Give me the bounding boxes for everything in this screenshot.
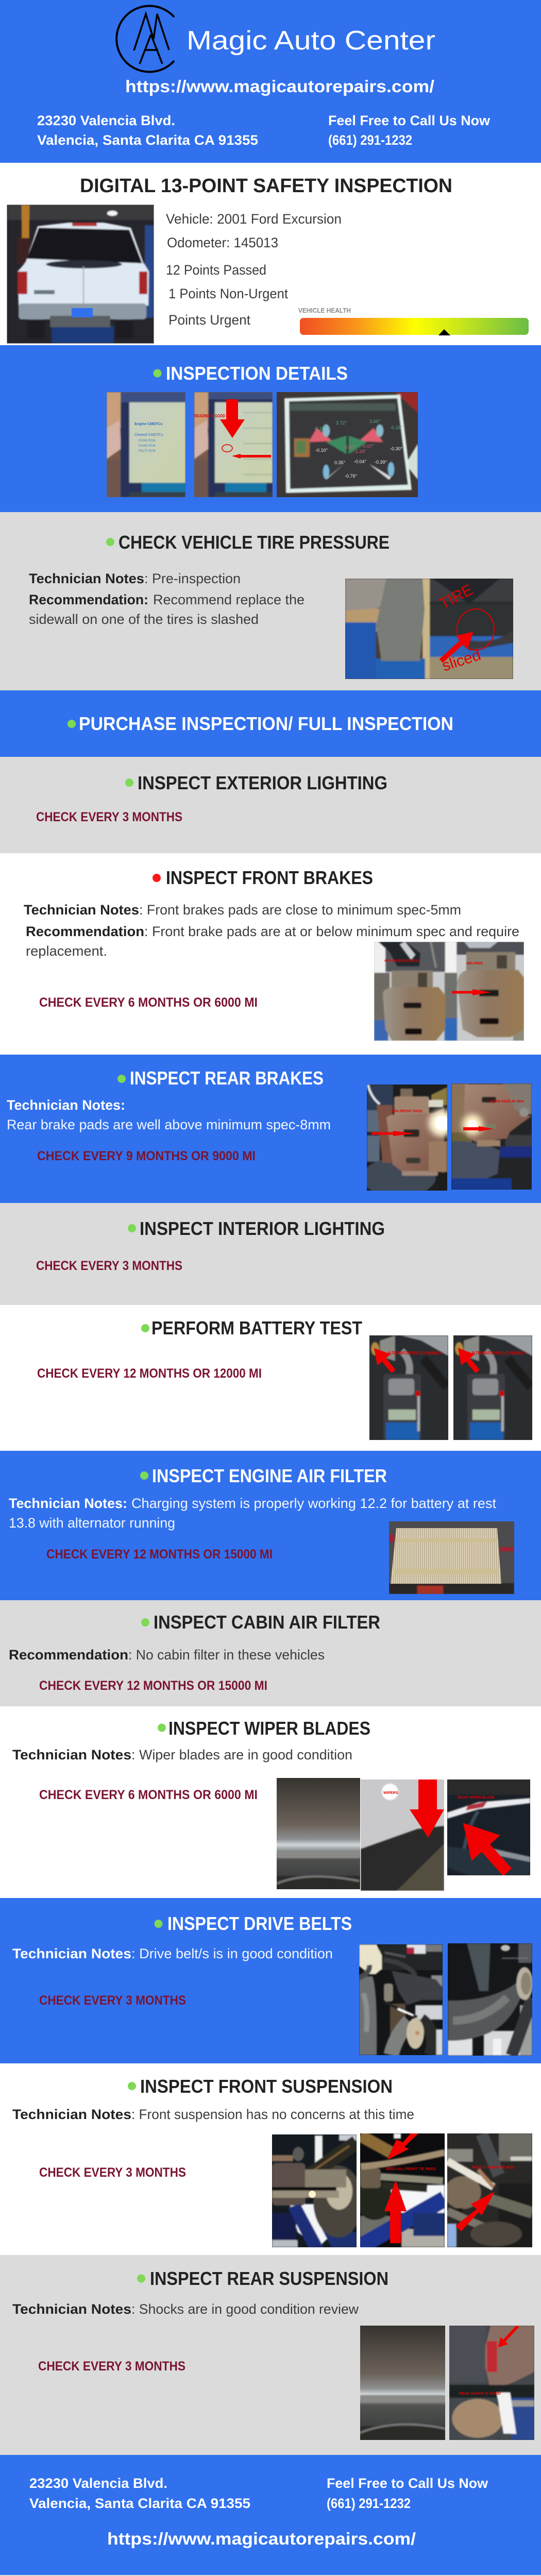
vehicle details: 12 Points Passed xyxy=(166,262,266,278)
heading: cabin air filter: INSPECT CABIN AIR FILTER xyxy=(154,1612,380,1633)
panel: inspect wiper blades xyxy=(0,1706,541,1898)
photo: battery tester one xyxy=(369,1335,448,1440)
photo: wheel alignment printout: 0.35° xyxy=(334,460,346,465)
photo: rear caliper two xyxy=(451,1083,532,1190)
technician notes: Charging system is properly working 12.2 for battery at rest xyxy=(131,1496,496,1511)
panel: perform battery test xyxy=(0,1305,541,1451)
panel: inspect engine air filter xyxy=(0,1451,541,1600)
photo: front suspension two: NEED ALL FRONT TIE RODS xyxy=(386,2167,436,2171)
photo: wheel alignment printout: -0.10° xyxy=(315,448,328,453)
photo: front suspension two xyxy=(360,2133,445,2247)
photo: wheel alignment printout: 3.72° xyxy=(336,420,347,426)
technician notes: Technician Notes: xyxy=(7,1097,125,1113)
photo: wheel alignment printout xyxy=(277,392,418,497)
photo: rear suspension windshield xyxy=(360,2326,445,2440)
recommendation: : No cabin filter in these vehicles xyxy=(128,1647,325,1663)
service interval: CHECK EVERY 3 MONTHS xyxy=(38,2359,185,2374)
technician notes xyxy=(7,1097,331,1132)
service interval: CHECK EVERY 12 MONTHS OR 15000 MI xyxy=(39,1679,267,1693)
service interval: CHECK EVERY 3 MONTHS xyxy=(39,1993,186,2008)
technician notes: : Front brake pads are at or below minimum spec and require xyxy=(144,924,519,939)
technician notes: Technician Notes xyxy=(29,571,144,586)
recommendation xyxy=(9,1647,325,1663)
technician notes: Technician Notes xyxy=(12,1946,131,1961)
heading: exterior lighting: INSPECT EXTERIOR LIGHTING xyxy=(138,772,387,793)
photo: wiper with red arrow: WIPERS xyxy=(383,1791,398,1795)
photo: rear wiper blade xyxy=(447,1780,530,1875)
photo: front suspension one xyxy=(272,2134,357,2247)
technician notes xyxy=(24,902,519,959)
technician notes xyxy=(29,571,305,627)
photo: tires with slice marked: TIRE xyxy=(437,581,476,613)
technician notes: : Pre-inspection xyxy=(144,571,241,586)
vehicle details: Points Urgent xyxy=(168,312,250,328)
service interval: CHECK EVERY 3 MONTHS xyxy=(36,810,182,824)
vehicle details: Odometer: 145013 xyxy=(167,235,278,250)
technician notes: Technician Notes: xyxy=(9,1496,127,1511)
address: Valencia, Santa Clarita CA 91355 xyxy=(37,132,258,148)
service interval: CHECK EVERY 6 MONTHS OR 6000 MI xyxy=(39,995,258,1010)
service interval: CHECK EVERY 9 MONTHS OR 9000 MI xyxy=(37,1149,256,1163)
technician notes: Recommendation xyxy=(26,924,144,939)
panel: header xyxy=(0,0,541,163)
technician notes: : Wiper blades are in good condition xyxy=(131,1747,352,1762)
heading: drive belts: INSPECT DRIVE BELTS xyxy=(167,1913,352,1934)
technician notes: sidewall on one of the tires is slashed xyxy=(29,612,259,627)
service interval: CHECK EVERY 12 MONTHS OR 12000 MI xyxy=(37,1366,262,1381)
vehicle details: 1 Points Non-Urgent xyxy=(168,286,288,301)
panel: inspection details xyxy=(0,345,541,512)
photo: scan tool codes: P1000 PCM xyxy=(139,439,155,443)
technician notes: 13.8 with alternator running xyxy=(9,1515,175,1531)
recommendation: Recommendation xyxy=(9,1647,128,1663)
phone xyxy=(327,2476,488,2511)
service interval: CHECK EVERY 12 MONTHS OR 15000 MI xyxy=(46,1547,273,1562)
photo: wheel alignment printout: -0.39° xyxy=(375,460,387,465)
icon: Magic Auto logo xyxy=(116,6,174,72)
photo: front brake calipers xyxy=(374,942,524,1041)
photo: wheel alignment printout: -0.76° xyxy=(345,473,358,479)
service interval: CHECK EVERY 6 MONTHS OR 6000 MI xyxy=(39,1788,258,1802)
phone: Feel Free to Call Us Now xyxy=(328,113,491,128)
technician notes: Technician Notes xyxy=(24,902,139,918)
photo: windshield wipers front xyxy=(277,1778,360,1889)
heading: rear brakes: INSPECT REAR BRAKES xyxy=(130,1067,324,1089)
heading: engine air filter: INSPECT ENGINE AIR FILTER xyxy=(152,1465,387,1486)
panel: check vehicle tire pressure xyxy=(0,512,541,690)
technician notes xyxy=(12,2107,414,2122)
panel: inspect rear brakes xyxy=(0,1055,541,1203)
photo: engine air filter xyxy=(389,1521,514,1594)
technician notes: : Front suspension has no concerns at this time xyxy=(131,2107,414,2122)
phone: (661) 291-1232 xyxy=(328,132,412,148)
photo: rear caliper one: 65% FRONT PADS xyxy=(392,1110,422,1113)
photo: engine bay belt two xyxy=(448,1943,532,2056)
photo: front suspension three xyxy=(447,2133,532,2247)
vehicle details: Vehicle: 2001 Ford Excursion xyxy=(166,211,342,227)
photo: wiper with red arrow xyxy=(361,1780,444,1891)
panel: inspect drive belts xyxy=(0,1898,541,2063)
panel: inspect front suspension xyxy=(0,2063,541,2255)
panel: footer contact xyxy=(0,2455,541,2575)
heading: interior lighting: INSPECT INTERIOR LIGHTING xyxy=(140,1218,385,1239)
heading: battery test: PERFORM BATTERY TEST xyxy=(151,1317,362,1338)
website url: https://www.magicautorepairs.com/ xyxy=(125,77,434,96)
photo: scan data with arrows: READING IS GOOD xyxy=(194,414,225,418)
photo: scan tool codes xyxy=(107,392,185,497)
vehicle details xyxy=(166,211,342,328)
technician notes: replacement. xyxy=(26,943,107,959)
technician notes: Recommendation: xyxy=(29,592,148,607)
panel: inspect front brakes xyxy=(0,853,541,1055)
photo: tires with slice marked: sliced xyxy=(440,647,483,675)
photo: rear caliper one xyxy=(367,1084,447,1191)
technician notes: Rear brake pads are well above minimum spec-8mm xyxy=(7,1117,331,1132)
heading: rear suspension: INSPECT REAR SUSPENSION xyxy=(150,2268,388,2289)
photo: wheel alignment printout: -0.57° xyxy=(344,445,357,450)
technician notes xyxy=(9,1496,496,1531)
website url: https://www.magicautorepairs.com/ xyxy=(107,2529,416,2548)
address: 23230 Valencia Blvd. xyxy=(37,113,175,128)
technician notes: Technician Notes xyxy=(12,2301,131,2317)
technician notes: Technician Notes xyxy=(12,2107,131,2122)
heading: tire pressure: CHECK VEHICLE TIRE PRESSURE xyxy=(119,532,390,553)
panel: inspect rear suspension xyxy=(0,2255,541,2455)
technician notes xyxy=(12,1946,333,1961)
photo: wheel alignment printout: -0.16° xyxy=(390,425,403,430)
panel: vehicle summary xyxy=(0,163,541,345)
panel: purchase inspection banner xyxy=(0,690,541,757)
photo: tires with slice marked xyxy=(345,579,513,679)
photo: wheel alignment printout: -1.24° xyxy=(354,449,367,454)
heading: front brakes: INSPECT FRONT BRAKES xyxy=(166,867,373,888)
address xyxy=(29,2476,250,2511)
photo: front brake calipers: 45% ON BRAKE PADS xyxy=(384,959,419,963)
technician notes: : Drive belt/s is in good condition xyxy=(131,1946,333,1961)
photo: wheel alignment printout: 3.60° xyxy=(369,419,381,424)
panel: inspect exterior lighting xyxy=(0,757,541,853)
photo: engine bay belt one xyxy=(359,1944,443,2055)
photo: battery tester two xyxy=(453,1335,532,1440)
address: 23230 Valencia Blvd. xyxy=(29,2476,167,2491)
service interval: CHECK EVERY 3 MONTHS xyxy=(36,1259,182,1273)
panel: inspect cabin air filter xyxy=(0,1600,541,1706)
technician notes: : Shocks are in good condition review xyxy=(131,2301,359,2317)
photo: scan tool codes: Cleared CMDTCs xyxy=(134,433,163,437)
phone: Feel Free to Call Us Now xyxy=(327,2476,488,2491)
technician notes: Recommend replace the xyxy=(153,592,305,607)
photo: rear wiper blade: REAR WIPER BLADE xyxy=(458,1796,495,1800)
phone: (661) 291-1232 xyxy=(327,2496,411,2511)
photo: wheel alignment printout: -0.11° xyxy=(314,426,326,431)
vehicle health gauge xyxy=(298,307,529,335)
photo: scan tool codes: Engine CMDTCs xyxy=(134,422,163,426)
photo: rear shock: REAR SHOCK IS GOOD xyxy=(459,2392,501,2396)
technician notes xyxy=(12,2301,359,2317)
technician notes: Technician Notes xyxy=(12,1747,131,1762)
photo: wheel alignment printout: -0.67° xyxy=(362,444,375,449)
phone xyxy=(328,113,491,148)
service interval: CHECK EVERY 3 MONTHS xyxy=(39,2165,186,2180)
vehicle health gauge: VEHICLE HEALTH xyxy=(298,307,351,314)
photo: scan data with arrows xyxy=(194,392,273,497)
brand name: Magic Auto Center xyxy=(187,26,435,56)
photo: wheel alignment printout: -0.30° xyxy=(390,446,403,451)
photo: front suspension three: NEED IT INNER TIE ROD xyxy=(472,2166,514,2170)
heading: inspection details: INSPECTION DETAILS xyxy=(166,363,348,384)
photo: scan tool codes: P0171 PCM xyxy=(139,450,155,453)
photo: wheel alignment printout: -0.04° xyxy=(354,459,367,464)
photo: rear shock xyxy=(449,2326,534,2440)
technician notes: : Front brakes pads are close to minimum spec-5mm xyxy=(139,902,461,918)
photo: scan tool codes: P1000 PCM xyxy=(139,445,155,448)
heading: front suspension: INSPECT FRONT SUSPENSION xyxy=(140,2076,393,2097)
address: Valencia, Santa Clarita CA 91355 xyxy=(29,2496,250,2511)
technician notes xyxy=(12,1747,352,1762)
panel: inspect interior lighting xyxy=(0,1203,541,1305)
heading: wiper blades: INSPECT WIPER BLADES xyxy=(168,1718,370,1739)
photo: front brake calipers: 45% PADS xyxy=(466,962,483,965)
photo: white Ford Excursion rear xyxy=(7,205,154,344)
address xyxy=(37,113,258,148)
photo: rear caliper two: REAR PADS AT 65% xyxy=(490,1100,525,1104)
title: DIGITAL 13-POINT SAFETY INSPECTION xyxy=(80,175,452,197)
panel: purchase inspection banner: PURCHASE INSPECTION/ FULL INSPECTION xyxy=(79,713,453,734)
